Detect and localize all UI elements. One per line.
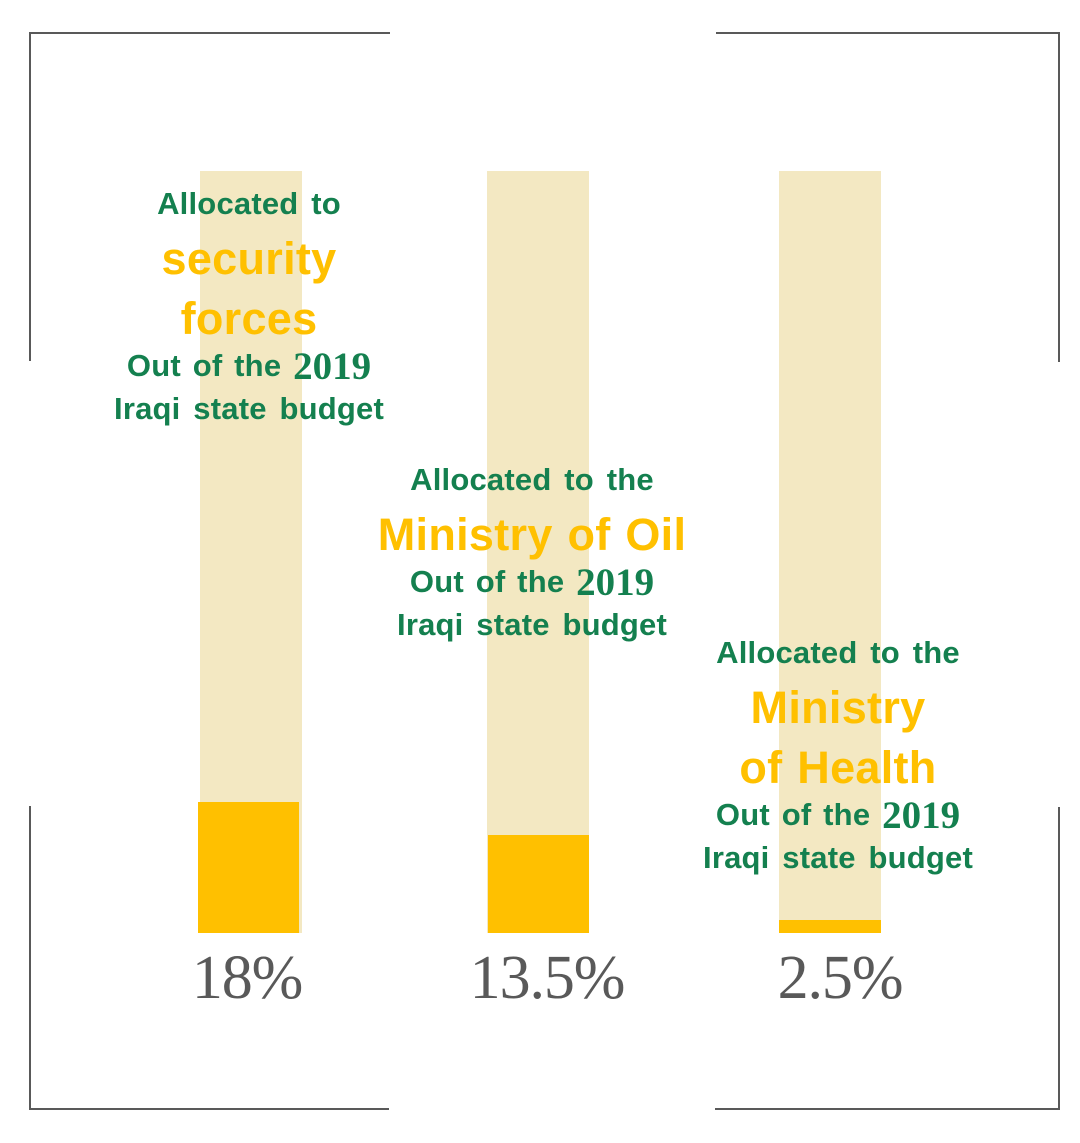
value 1: 18% xyxy=(192,944,302,1012)
label 3: of Health xyxy=(739,742,937,793)
label 3: Ministry xyxy=(751,682,925,733)
label 2: Allocated to the xyxy=(410,462,654,497)
label 2: Iraqi state budget xyxy=(397,607,667,642)
bar 1 track xyxy=(200,171,302,933)
label 1: Out of the 2019 xyxy=(127,345,371,388)
value 3: 2.5% xyxy=(778,944,902,1012)
label 3 xyxy=(703,635,973,875)
label 2: Out of the 2019 xyxy=(410,561,654,604)
label 3: Out of the 2019 xyxy=(716,794,960,837)
label 1: forces xyxy=(181,293,317,344)
label 2 xyxy=(378,462,686,642)
label 3: Allocated to the xyxy=(716,635,960,670)
label 1: Iraqi state budget xyxy=(114,391,384,426)
bar 3 track xyxy=(779,171,881,933)
value 2: 13.5% xyxy=(470,944,624,1012)
label 1 xyxy=(114,186,384,426)
bar 3 fill xyxy=(779,920,881,933)
label 1: Allocated to xyxy=(157,186,341,221)
label 2: Ministry of Oil xyxy=(378,509,686,560)
label 3: Iraqi state budget xyxy=(703,840,973,875)
bar 2 fill xyxy=(488,835,589,933)
bar 2 track xyxy=(487,171,589,933)
label 1: security xyxy=(162,233,336,284)
bar 1 fill xyxy=(198,802,299,933)
